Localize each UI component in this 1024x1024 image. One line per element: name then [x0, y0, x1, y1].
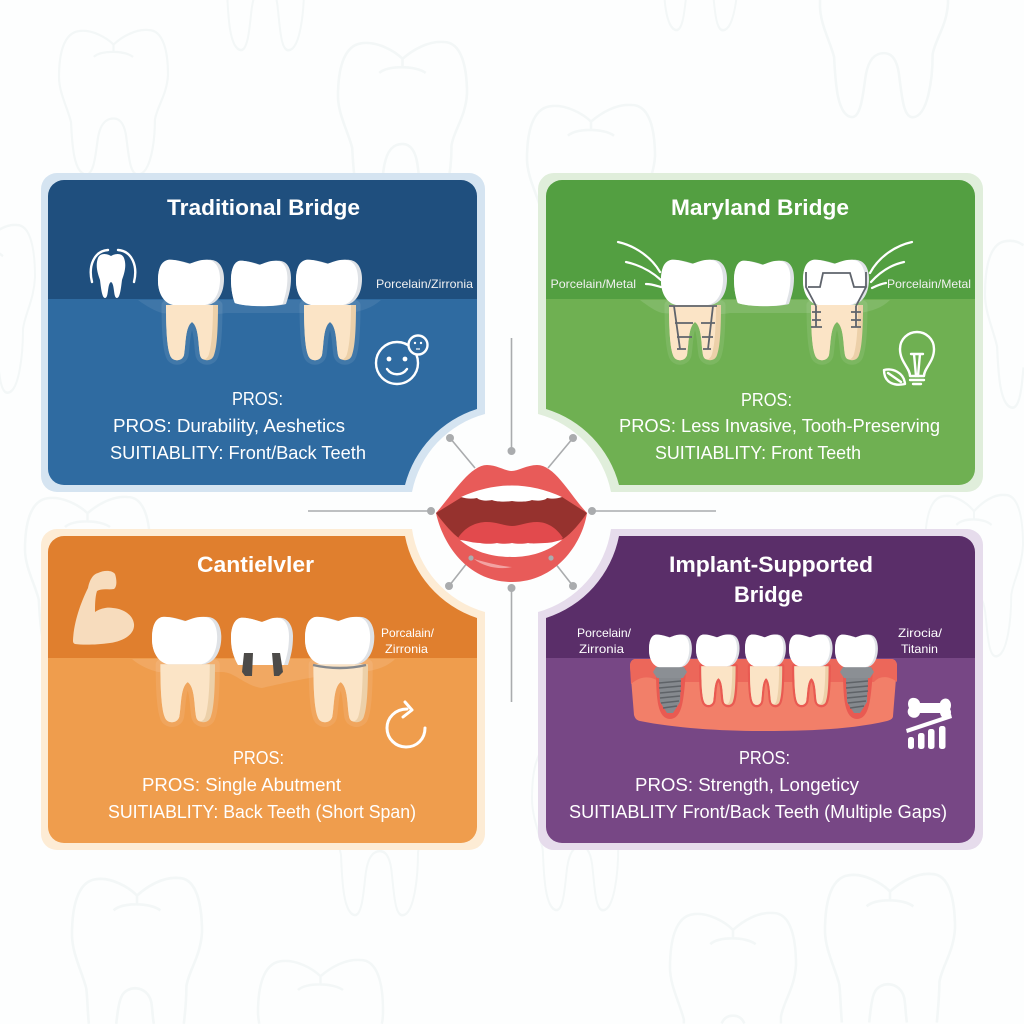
text: pros and suitability: SUITIABLITY: Back Teeth (Short Span) — [108, 802, 416, 822]
illustration: traditional bridge teeth — [158, 260, 362, 360]
illustration: wisps — [618, 242, 912, 288]
heading — [669, 552, 873, 607]
label: material — [381, 626, 435, 656]
label: material left: Porcelain/Metal — [550, 277, 636, 291]
label: material: Zirronia — [385, 642, 428, 656]
icon: circular arrow — [387, 702, 425, 747]
label: material left — [577, 626, 632, 656]
icon: bone and bars — [906, 698, 952, 749]
text: pros and suitability: PROS: — [739, 748, 790, 768]
label: material left: Porcelain/ — [577, 626, 632, 640]
icon: flexed arm — [73, 571, 134, 645]
text: pros and suitability: PROS: — [232, 389, 283, 409]
text: pros and suitability — [110, 389, 366, 463]
heading: Traditional Bridge — [167, 195, 360, 220]
text: pros and suitability — [569, 748, 947, 822]
text: pros and suitability: SUITIABLITY: Front/Back Teeth — [110, 443, 366, 463]
text: pros and suitability: PROS: Strength, Longeticy — [635, 775, 859, 795]
icon: smiley faces — [376, 336, 428, 384]
text: pros and suitability: PROS: — [741, 390, 792, 410]
illustration: cantilever teeth — [152, 617, 374, 722]
text: pros and suitability: PROS: Durability, Aeshetics — [113, 416, 345, 436]
icon: light bulb and leaf — [884, 332, 934, 385]
text: pros and suitability: PROS: Single Abutment — [142, 775, 341, 795]
text: pros and suitability: PROS: Less Invasive, Tooth-Preserving — [619, 416, 940, 436]
text: pros and suitability — [108, 748, 416, 822]
label: material right: Titanin — [901, 642, 938, 656]
text: pros and suitability: PROS: — [233, 748, 284, 768]
label: material left: Zirronia — [579, 642, 624, 656]
connector lines — [308, 338, 716, 702]
heading: Maryland Bridge — [671, 195, 849, 220]
label: material right: Porcelain/Metal — [887, 277, 971, 291]
label: material right: Zirocia/ — [898, 626, 943, 640]
label: material: Porcelain/Zirronia — [376, 277, 473, 291]
text: pros and suitability: SUITIABLITY Front/Back Teeth (Multiple Gaps) — [569, 802, 947, 822]
panel: Cantilever — [40, 529, 485, 853]
text: pros and suitability: SUITIABLITY: Front Teeth — [655, 443, 861, 463]
label: material: Porcalain/ — [381, 626, 435, 640]
text: pros and suitability — [619, 390, 940, 463]
panel: Maryland Bridge — [538, 173, 983, 494]
label: material right — [898, 626, 943, 656]
heading: Cantielvler — [197, 552, 314, 577]
illustration: maryland bridge teeth — [661, 260, 869, 360]
icon: tooth with brackets — [91, 250, 135, 298]
illustration: gum with implants and teeth — [630, 635, 897, 731]
panel: Implant-Supported Bridge — [538, 529, 983, 853]
heading: Implant-Supported — [669, 552, 873, 577]
heading: Bridge — [734, 582, 803, 607]
illustration: open mouth — [436, 465, 587, 582]
panel: Traditional Bridge — [40, 173, 485, 494]
